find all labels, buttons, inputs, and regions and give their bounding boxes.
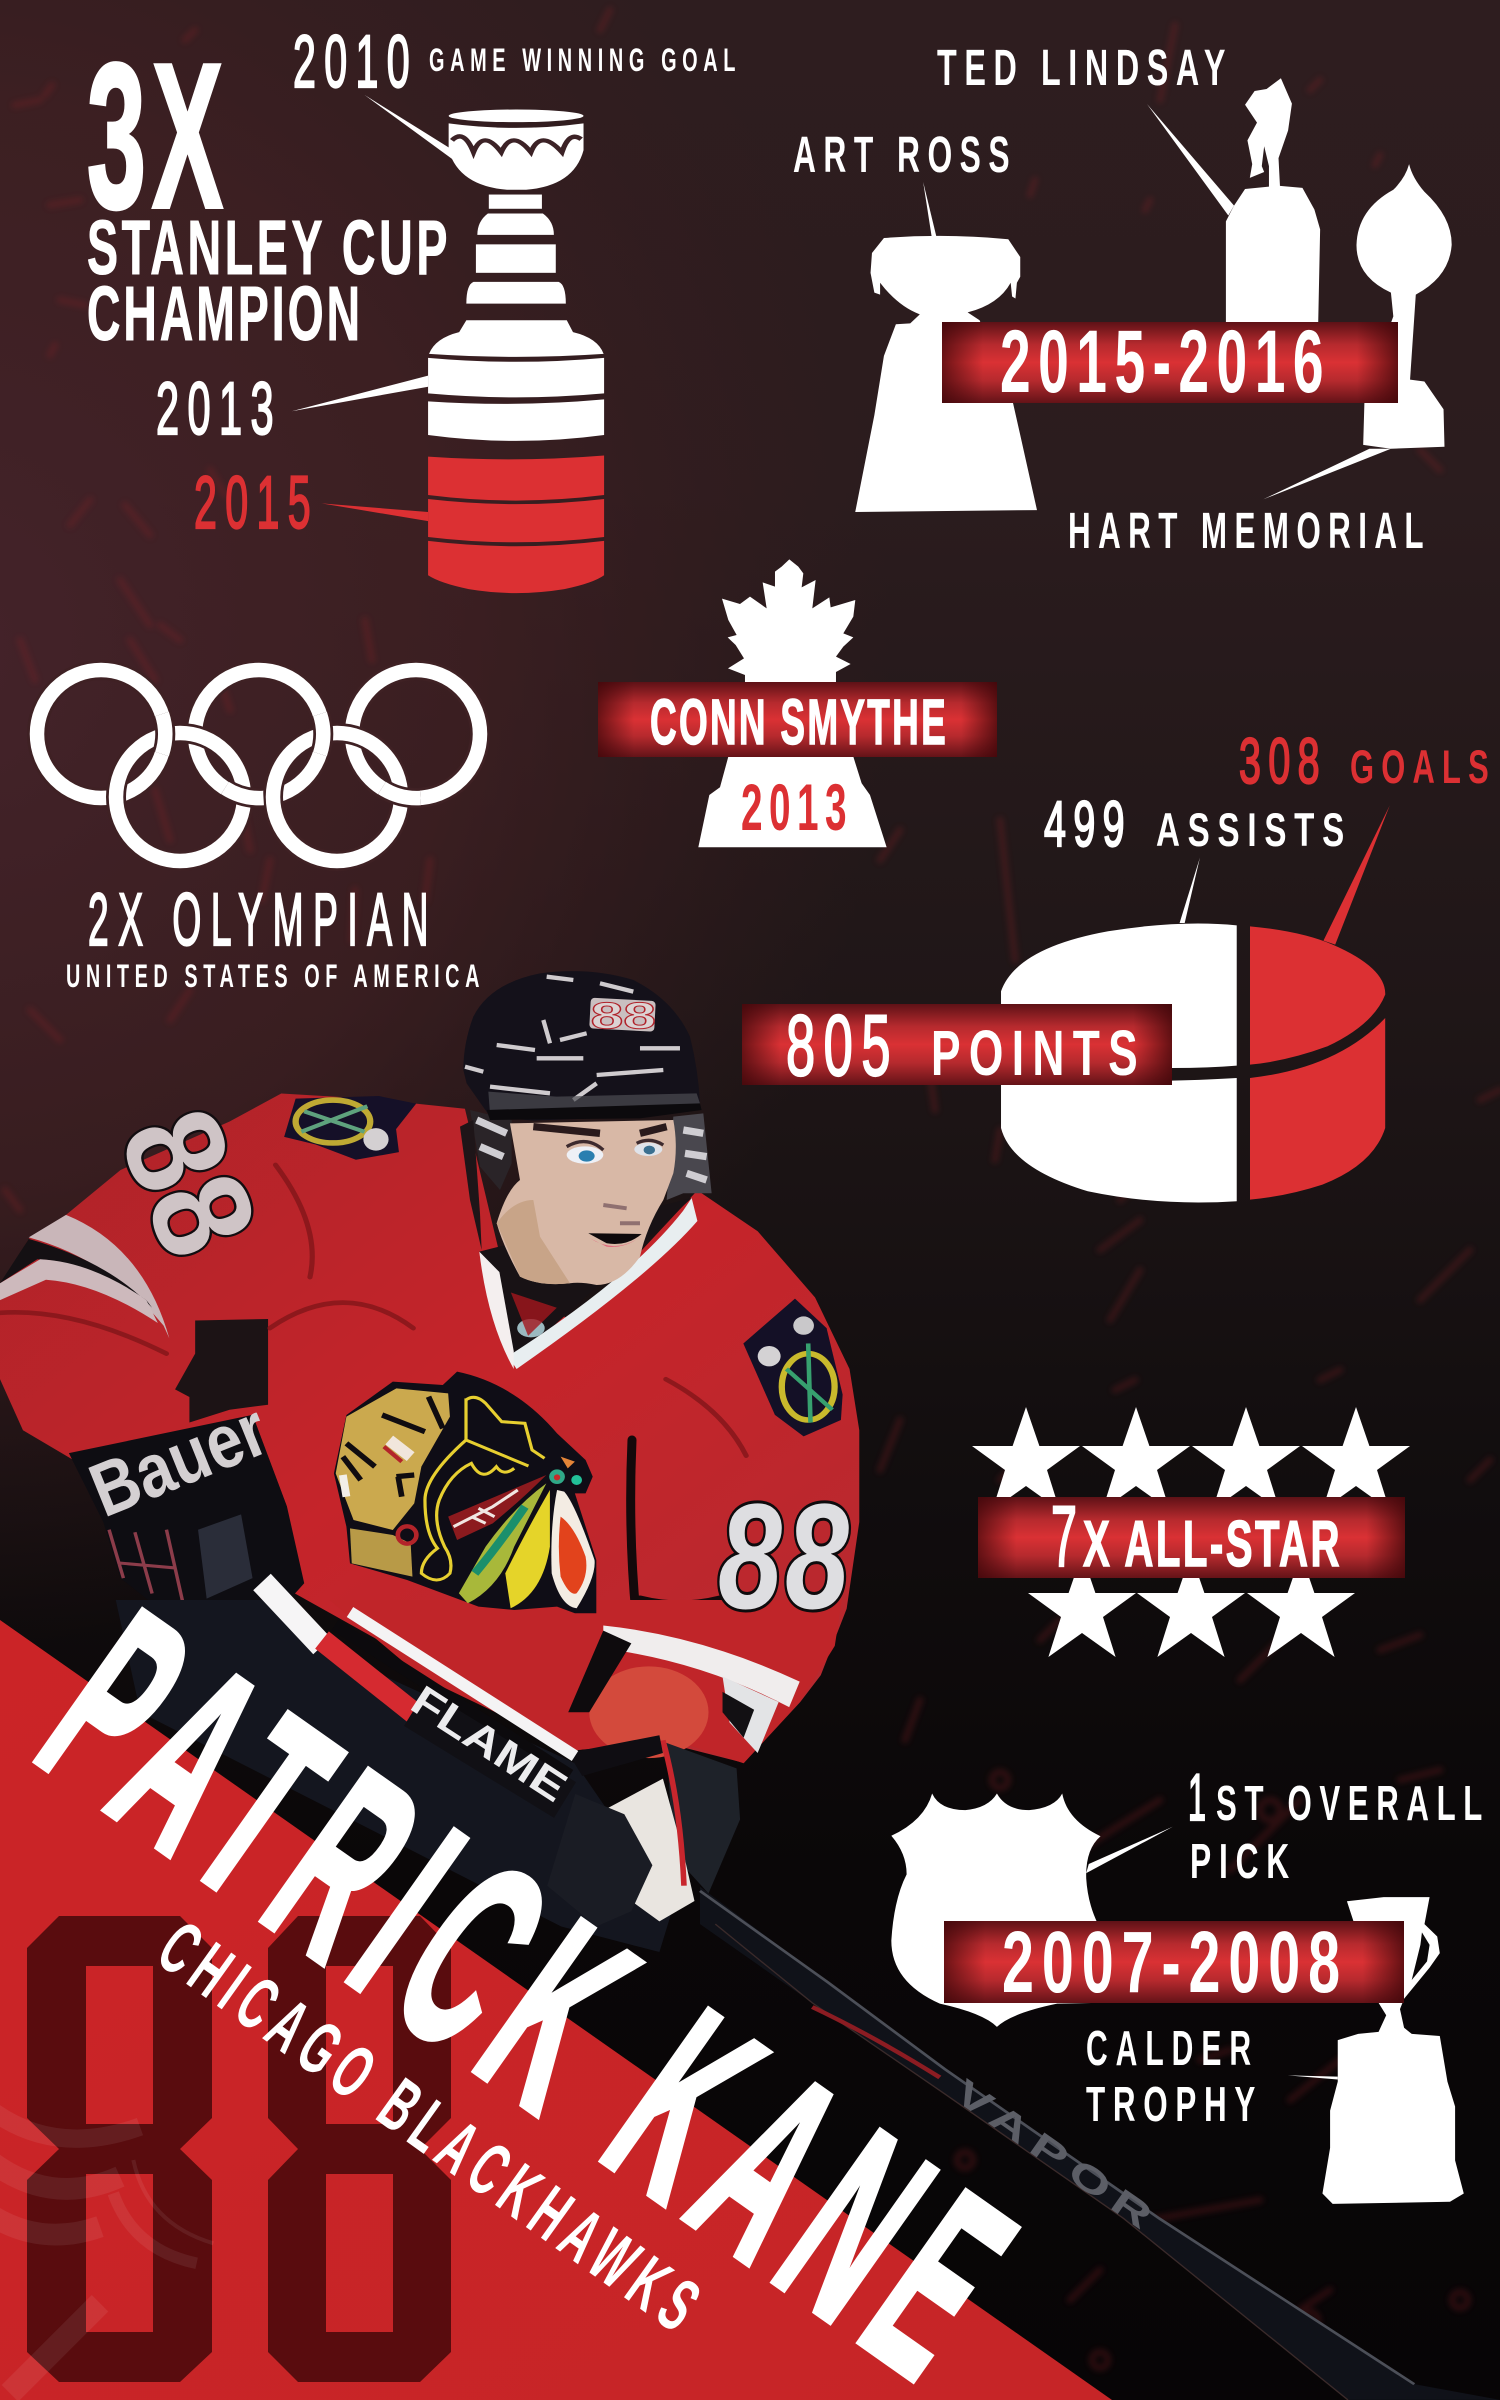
player: jersey (0, 1093, 859, 1763)
icon: maple leaf trophy (698, 559, 887, 847)
label: Calder Trophy: TROPHY (1086, 2078, 1263, 2132)
player: lower jersey (330, 1600, 842, 1763)
player: sleeve stripes (0, 1215, 169, 1338)
player: helmet (463, 971, 702, 1121)
player: shoulder patch left (284, 1096, 416, 1160)
player: hockey stick shaft (700, 1887, 1500, 2400)
label: Art Ross: ART ROSS (793, 126, 1017, 183)
player: collar and neck (479, 1198, 697, 1369)
label: game winning goal: GAME WINNING GOAL (429, 42, 741, 78)
panel: Olympics (37, 670, 485, 994)
label: Calder Trophy (1086, 2022, 1263, 2132)
label: Calder Trophy: CALDER (1086, 2022, 1259, 2076)
label: 499 assists (1044, 788, 1352, 860)
label: 499 assists: ASSISTS (1156, 803, 1352, 856)
icon: puck pie chart (1001, 805, 1390, 1203)
banner: 805 points: 805 (786, 998, 899, 1094)
label: 2015: 2015 (194, 461, 319, 544)
player: shoulder patch right (743, 1299, 843, 1436)
label: 1st overall pick (1188, 1760, 1490, 1889)
player: arm stripes (568, 1626, 800, 1758)
faded team logo watermark (0, 2112, 213, 2393)
label: 2013: 2013 (156, 367, 282, 450)
player: gap between arm and body (175, 1319, 268, 1423)
panel: Stanley Cup (87, 20, 741, 593)
jersey number 88 (27, 1916, 451, 2382)
banner: Conn Smythe (598, 682, 997, 758)
player: chest logo (334, 1372, 596, 1613)
heading: Stanley Cup Champion: STANLEY CUP (87, 205, 451, 291)
player: stick brand: VAPOR (947, 2071, 1168, 2242)
panel: points (742, 725, 1496, 1203)
heading: 3X: 3X (87, 21, 229, 251)
label: 308 goals: 308 (1239, 725, 1327, 797)
player: glove brand: Bauer (79, 1387, 279, 1534)
panel: all-star (972, 1407, 1410, 1657)
banner: Conn Smythe: CONN SMYTHE (650, 686, 948, 758)
label: 2010: 2010 (293, 20, 418, 103)
player photo illustration (0, 971, 1500, 2400)
player: jersey folds (0, 1165, 746, 1456)
icons: NHL shield and Calder trophy (891, 1794, 1464, 2204)
label: 2013: 2013 (741, 770, 853, 844)
player: pants and lower glove (116, 1600, 673, 1952)
banner: 7x all-star: 7 (1051, 1489, 1077, 1585)
player: hand glove (547, 1735, 740, 1927)
player: face (497, 1120, 676, 1285)
icons: seven stars (972, 1407, 1410, 1657)
label: Ted Lindsay: TED LINDSAY (937, 39, 1233, 96)
player: glove (69, 1415, 304, 1634)
label: 1st overall pick: 1 (1188, 1760, 1206, 1834)
player: stick blade brand: FLAME (403, 1676, 575, 1811)
icons: three trophies with leaders (855, 78, 1452, 512)
label: 499 assists: 499 (1044, 788, 1132, 860)
panel: Conn Smythe (598, 559, 997, 847)
panel: 2015-2016 awards (793, 39, 1452, 559)
banner: 7x all-star (978, 1489, 1405, 1585)
banner: 7x all-star: X ALL-STAR (1083, 1507, 1342, 1580)
player: jersey black folds (560, 1440, 720, 1692)
icon: Olympic rings (37, 670, 480, 861)
heading: 2X Olympian: 2X OLYMPIAN (88, 878, 438, 961)
player: arm number: 88 (718, 1472, 852, 1640)
banner: 805 points (742, 998, 1172, 1094)
heading: Stanley Cup Champion (87, 205, 451, 357)
icon: Stanley Cup trophy (292, 95, 604, 593)
banner: 805 points: POINTS (931, 1017, 1146, 1089)
heading: Stanley Cup Champion: CHAMPION (87, 271, 363, 357)
label: 1st overall pick: PICK (1190, 1835, 1297, 1889)
label: United States of America: UNITED STATES OF AMERICA (66, 958, 485, 994)
player: hair (460, 1110, 712, 1250)
player: helmet number: 88 (591, 995, 656, 1037)
label: 308 goals (1239, 725, 1496, 797)
player: sleeve number: 88 (90, 1088, 288, 1277)
player: stick blade (262, 1582, 575, 1800)
panel: 2007-2008 awards (891, 1760, 1490, 2204)
red diagonal banner (0, 1620, 1112, 2400)
